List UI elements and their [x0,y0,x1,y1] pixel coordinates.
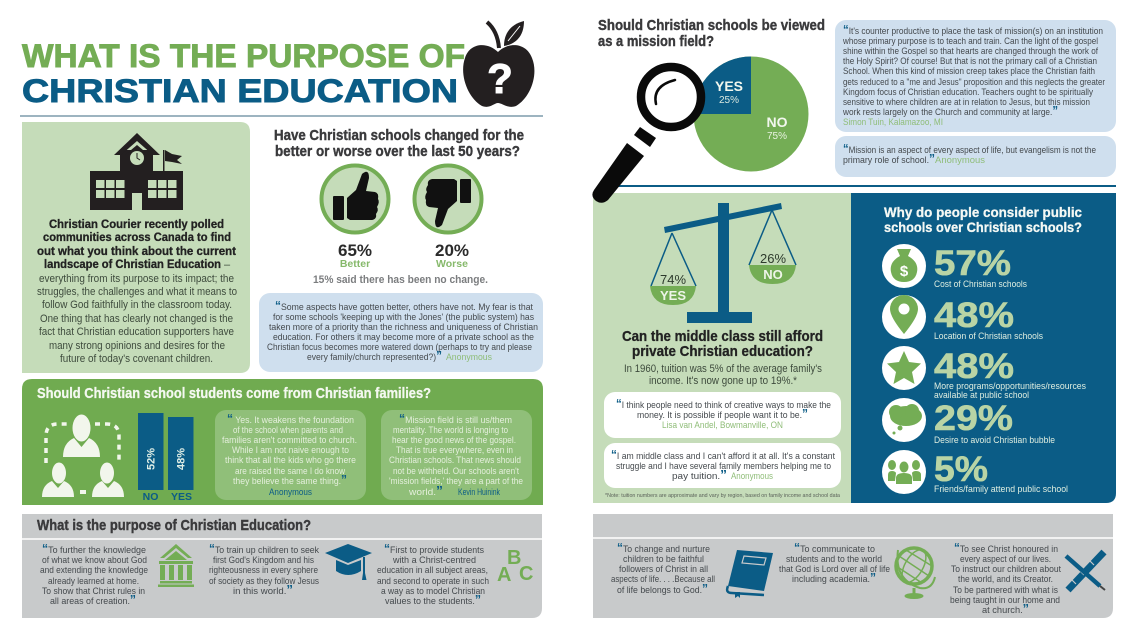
stat: 5% friends [882,450,1068,495]
quote: Christ honoured: “To see Christ honoured in [954,540,1058,555]
intro text: future of today's covenant children. [60,353,213,365]
stat: 57% cost [882,244,1027,290]
quote: change and nurture: “To change and nurture [617,540,710,555]
intro text: communities across Canada to find [43,230,231,244]
heading: mission field: Should Christian schools be viewed [598,17,825,34]
pie chart: yes 25, no 75: 75% [767,131,787,142]
intro text: follow God faithfully in the classroom today. [42,299,232,311]
stat: 57% cost: $ [900,263,909,280]
intro text [37,217,237,365]
quote: train up children [209,541,319,597]
callout: Kevin Huinink quote: Christian schools. That news should [389,455,521,466]
icon: school house [158,544,194,587]
callout: Kevin Huinink quote: world.” [408,483,443,498]
quote: Christ honoured: To be partnered with what is [953,585,1058,596]
quote: further the knowledge [40,541,148,607]
quote: provide students: “First to provide students [384,541,484,556]
footnote: *Note: tuition numbers are approximate and vary by region, based on family income and school data [605,493,840,499]
quote: change and nurture: of life belongs to God.” [617,581,708,596]
stat: 20% worse: 20% [435,241,469,260]
quote: Christ honoured: every aspect of our lives. [960,554,1051,565]
bar chart: 52 no, 48 yes: 52% [146,448,158,470]
stat: 57% cost: 57% [934,244,1011,283]
icon: book [727,550,773,598]
icon: balance scale: 26% [760,251,786,266]
icon: balance scale [650,203,796,323]
panel: why public schools [851,193,1116,503]
panel: middle class affordability [593,193,851,503]
callout: counter productive quote: Kingdom focus of Christian education. Teachers ought to be spiritually [843,87,1093,98]
panel: Christian families [22,379,543,505]
title: WHAT IS THE PURPOSE OF [22,38,465,74]
heading: better or worse: better or worse over the last 50 years? [275,143,520,160]
bar chart: 52 no, 48 yes [138,413,194,503]
callout: middle class quote: “I am middle class and I can't afford it at all. It's a constant [611,447,835,462]
callout: counter productive quote: “It's counter productive to place the task of mission(s) on an institution [843,22,1103,37]
pie chart: yes 25, no 75 [694,56,808,172]
pie chart: yes 25, no 75: YES [715,78,743,94]
quote: further the knowledge: “To further the knowledge [42,541,146,556]
heading: mission field: as a mission field? [598,33,714,50]
heading: What is the purpose of Christian Education? [37,517,311,534]
callout: Kevin Huinink quote: not be withheld. Our schools aren't [393,466,519,477]
callout: yes quote: think that all the kids who go there [225,455,356,466]
quote: Christ honoured: being taught in our home and [950,595,1060,606]
callout: better or worse quote: “Some aspects have gotten better, others have not. My fear is that [275,298,533,313]
text: tuition fact [624,363,822,387]
quote: Christ honoured: at church.” [982,601,1029,616]
stat: 20% worse: Worse [436,258,468,270]
callout: better or worse quote: for some schools 'keeping up with the Jones' (the public system) has [273,312,534,323]
quote: change and nurture: followers of Christ in all [619,564,708,575]
callout: better or worse quote: Anonymous [446,352,492,363]
panel: purpose of Christian Education (left) [22,514,542,618]
quote: provide students [377,541,489,607]
heading: Can the middle class still afford [622,328,823,345]
quote: train up children: of society as they follow Jesus [209,576,319,587]
pie chart: yes 25, no 75: 25% [719,95,739,106]
intro text: One thing that has clearly not changed is the [40,313,233,325]
quote: communicate to students [779,540,890,585]
heading: mission field [598,17,825,50]
bar chart: 52 no, 48 yes: 48% [176,448,188,470]
quote: further the knowledge: already learned at home. [48,576,139,587]
quote: train up children: in this world.” [233,582,293,597]
callout: middle class quote [604,443,841,488]
callout: yes quote [215,410,366,500]
callout: yes quote: “ Yes. It weakens the foundation [227,411,354,426]
callout: yes quote: they believe the same thing.” [233,472,347,487]
callout: yes quote: families aren't committed to church. [222,435,357,446]
quote: further the knowledge: of what we know about God [42,555,147,566]
quote: provide students: and second to operate in such [377,576,489,587]
text: tuition fact: In 1960, tuition was 5% of the average family's [624,363,822,375]
bar chart: 52 no, 48 yes: NO [143,491,158,503]
intro text: Christian Courier recently polled [49,217,224,231]
callout: counter productive quote [835,20,1116,132]
callout: Kevin Huinink quote: Kevin Huinink [458,487,500,498]
callout: counter productive quote: work rests largely on the Church and community at large.” [842,103,1058,118]
heading [884,204,1082,235]
heading: Why do people consider public [884,204,1082,220]
icon: apple with question mark: ? [487,55,513,102]
heading: better or worse: Have Christian schools changed for the [274,127,524,144]
intro text: fact that Christian education supporters have [39,326,234,338]
stat: 20% worse [435,241,469,270]
quote: Christ honoured: To instruct our children about [951,564,1061,575]
callout: creative ways quote: “I think people need to think of creative ways to make the [616,396,831,411]
quote: Christ honoured: the world, and its Creator. [958,574,1053,585]
callout: middle class quote: struggle and I have several family members helping me to [616,461,831,472]
quote: communicate to students: “To communicate to [794,540,875,555]
icon: school building [90,133,183,210]
callout: Kevin Huinink quote: “Mission field is still us/them [399,411,512,426]
callout: Kevin Huinink quote: 'mission fields,' they are a part of the [389,476,523,487]
panel: introduction [22,122,250,373]
pie chart: yes 25, no 75: NO [766,114,788,130]
quote: train up children: “To train up children to seek [209,541,319,556]
title: CHRISTIAN EDUCATION [22,73,458,109]
quote: communicate to students: including academia.” [792,570,876,585]
icon: letters ABC: A [497,564,511,586]
quote: communicate to students: that God is Lord over all of life [779,564,890,575]
stat: 5% friends: 5% [934,450,988,489]
quote: train up children: righteousness in every sphere [209,565,318,576]
quote: Christ honoured [950,540,1061,616]
stat: 65% better: 65% [338,241,372,260]
stat: 65% better: Better [340,258,370,270]
heading: private Christian education? [632,343,813,360]
intro text: everything from its purpose to its impact; the [39,273,234,285]
stat: 29% bubble [882,398,1055,446]
callout: evangelism quote: “Mission is an aspect of every aspect of life, but evangelism is not the [843,141,1096,156]
callout: counter productive quote: Simon Tuin, Kalamazoo, MI [843,117,943,128]
quote: further the knowledge: and extending the knowledge [40,565,148,576]
callout: evangelism quote [835,136,1116,177]
callout: counter productive quote: whose primary purpose is to teach and train. Can the light of the gospel [842,36,1098,47]
icon: magnifying glass [592,67,701,203]
callout: yes quote: While I am not naive enough to [232,445,349,456]
callout: evangelism quote: primary role of school.” [843,151,935,166]
stat: 48% location: Location of Christian schools [934,331,1043,342]
stat: 48% programs: 48% [934,347,1014,386]
quote: provide students: education in all subject areas, [377,565,488,576]
icon: letters ABC: C [519,563,533,585]
stat: 48% programs [882,346,1086,401]
quote: change and nurture [611,540,715,596]
callout: yes quote: Anonymous [269,487,312,498]
callout: better or worse quote [259,293,543,372]
quote: change and nurture: aspects of life. . . .Because all [611,574,715,585]
panel: purpose of Christian Education (right) [593,514,1113,618]
heading [622,328,823,360]
callout: counter productive quote: the Holy Spirit? Of course! But that is not the primary call of a Christian [843,56,1097,67]
stat: 48% programs: available at public school [934,390,1029,401]
stat: 5% friends: Friends/family attend public school [934,484,1068,495]
callout: Kevin Huinink quote: hear the good news of the gospel. [392,435,516,446]
quote: provide students: with a Christ-centred [392,555,476,566]
icon: balance scale: NO [763,267,783,282]
callout: counter productive quote: shine within the Gospel so that hearts are changed through the work of [843,46,1098,57]
callout: yes quote: are raised the same I do know [235,466,345,477]
heading: better or worse [274,127,524,160]
icon: letters ABC [497,547,533,586]
icon: thumbs down [414,166,482,232]
icon: thumbs up [322,166,388,232]
icon: apple with question mark [463,21,534,107]
stat: 29% bubble: Desire to avoid Christian bubble [934,435,1055,446]
callout: better or worse quote: education. For others it may become more of a private school as the [273,332,534,343]
callout: yes quote: of the school when parents and [233,425,343,436]
title [22,38,465,109]
callout: counter productive quote: School. When this kind of mission creep takes place the Christian faith [843,66,1095,77]
callout: middle class quote: pay tuition.” [672,467,727,482]
callout: Kevin Huinink quote [381,410,532,500]
stat: 48% programs: More programs/opportunities/resources [934,381,1086,392]
quote: further the knowledge: To show that Christ rules in [42,586,145,597]
callout: better or worse quote: every family/church represented?)” [307,348,442,363]
text: tuition fact: income. It's now gone up to 19%.* [649,375,798,387]
stat: 65% better [338,241,372,270]
quote: communicate to students: students and to the world [786,554,882,565]
callout: counter productive quote: sensitive to where children are at in relation to Jesus, but this mission [843,97,1090,108]
quote: train up children: first God's Kingdom and his [213,555,314,566]
icon: ruler and pencil [1066,552,1105,590]
callout: middle class quote: Anonymous [731,471,773,482]
text: no change: 15% said there has been no change. [313,274,488,286]
callout: creative ways quote: Lisa van Andel, Bowmanville, ON [662,420,783,431]
heading: Should Christian school students come from Christian families? [37,386,431,402]
callout: Kevin Huinink quote: That is true everywhere, even in [396,445,513,456]
bar chart: 52 no, 48 yes: YES [171,491,192,503]
stat: 57% cost: Cost of Christian schools [934,279,1027,290]
callout: better or worse quote: Christian focus becomes more watered down (perhaps to try and please [267,342,532,353]
quote: provide students: a way as to model Christian [381,586,485,597]
callout: better or worse quote: taken more of a priority than the richness and uniqueness of Christian [269,322,538,333]
callout: Kevin Huinink quote: mentality. The world is longing to [393,425,508,436]
stat: 29% bubble: 29% [934,399,1013,438]
stat: 48% location: 48% [934,296,1014,335]
intro text: out what you think about the current [37,244,236,258]
intro text: landscape of Christian Education [44,257,221,271]
intro text: struggles, the challenges and what it means to [37,286,237,298]
callout: creative ways quote: money. It is possible if people want it to be.” [637,406,808,421]
icon: letters ABC: B [507,547,521,569]
quote: provide students: values to the students.” [385,592,481,607]
quote: further the knowledge: all areas of creation.” [50,592,136,607]
callout: creative ways quote [604,392,841,438]
intro text: – [224,259,231,271]
callout: evangelism quote: Anonymous [935,155,985,166]
intro text: many strong opinions and desires for the [49,340,225,352]
icon: graduation cap [325,544,372,580]
icon: balance scale: YES [660,288,686,303]
icon: globe [896,546,935,598]
heading: schools over Christian schools? [884,219,1082,235]
icon: balance scale: 74% [660,272,686,287]
quote: change and nurture: children to be faithful [623,554,704,565]
stat: 48% location [882,295,1043,342]
icon: family group [42,414,124,497]
